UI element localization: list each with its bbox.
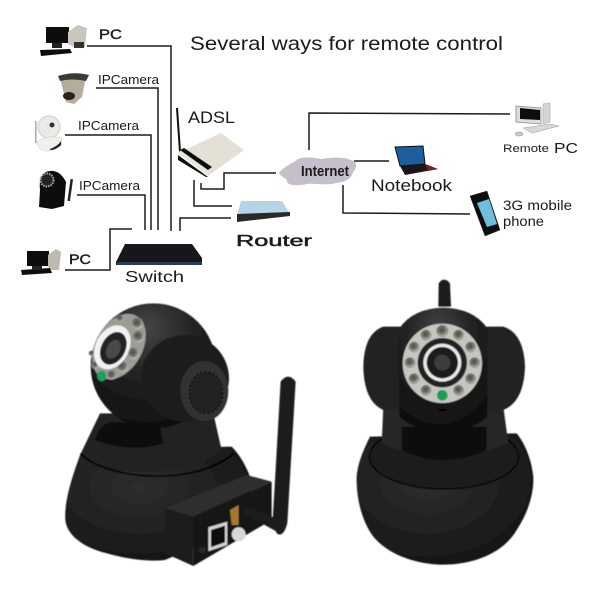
label: IPCamera 3: IPCamera (79, 179, 140, 193)
icon: internet cloud (279, 157, 356, 185)
gold connector (230, 505, 239, 525)
left camera photo (65, 303, 296, 566)
LEDs (89, 315, 144, 380)
label: 3G mobile phone (503, 198, 572, 229)
horizontal antenna base (241, 507, 280, 532)
label: 3G mobile phone: phone (503, 214, 544, 229)
label: bottom PC: PC (69, 251, 91, 267)
icon: 3G mobile phone (470, 191, 500, 236)
IR ring (403, 324, 482, 403)
icon: white IP camera (35, 116, 62, 151)
microphone (438, 409, 447, 411)
base rim (369, 424, 519, 489)
label: 3G mobile phone: 3G mobile (503, 198, 572, 213)
icon: notebook (395, 146, 438, 175)
power jack (199, 547, 206, 553)
side housing (141, 335, 229, 422)
label: notebook: Notebook (371, 176, 453, 195)
right camera photo (357, 280, 533, 565)
LEDs (405, 325, 480, 395)
label: switch: Switch (125, 269, 184, 286)
label: IPCamera 1: IPCamera (98, 73, 159, 87)
title: Several ways for remote control (190, 33, 503, 55)
icon: switch (116, 244, 202, 265)
antenna (438, 280, 451, 307)
label: IPCamera 2: IPCamera (78, 119, 139, 133)
green LED (437, 390, 448, 401)
lens ring (87, 319, 138, 376)
icon: ADSL modem (177, 108, 244, 177)
label: top PC: PC (99, 26, 122, 42)
label: remote PC: PC (554, 140, 578, 157)
label: remote PC: Remote (503, 143, 549, 155)
icon: bottom PC (21, 249, 61, 275)
neck (82, 413, 222, 472)
base dome (65, 447, 250, 561)
neck (382, 407, 508, 457)
LAN port (208, 522, 227, 551)
green LED (97, 371, 106, 381)
icon: remote PC (515, 103, 559, 136)
label: remote PC (503, 140, 578, 157)
label: ADSL: ADSL (188, 108, 235, 127)
label: internet: Internet (301, 163, 349, 180)
speaker (180, 361, 228, 421)
side housings (363, 327, 402, 410)
IR ring (81, 304, 157, 389)
icon: dome IP camera (58, 73, 89, 104)
icon: top PC (40, 25, 87, 56)
head sphere (91, 303, 216, 429)
network connection lines (65, 46, 510, 270)
sticker (232, 527, 246, 541)
antenna (273, 377, 296, 535)
head (399, 308, 487, 431)
label: router: Router (236, 233, 313, 250)
icon: black IP camera (39, 171, 73, 209)
icon: router (237, 201, 290, 222)
lens (418, 338, 467, 387)
rear box (165, 475, 272, 517)
base dome (357, 433, 533, 565)
